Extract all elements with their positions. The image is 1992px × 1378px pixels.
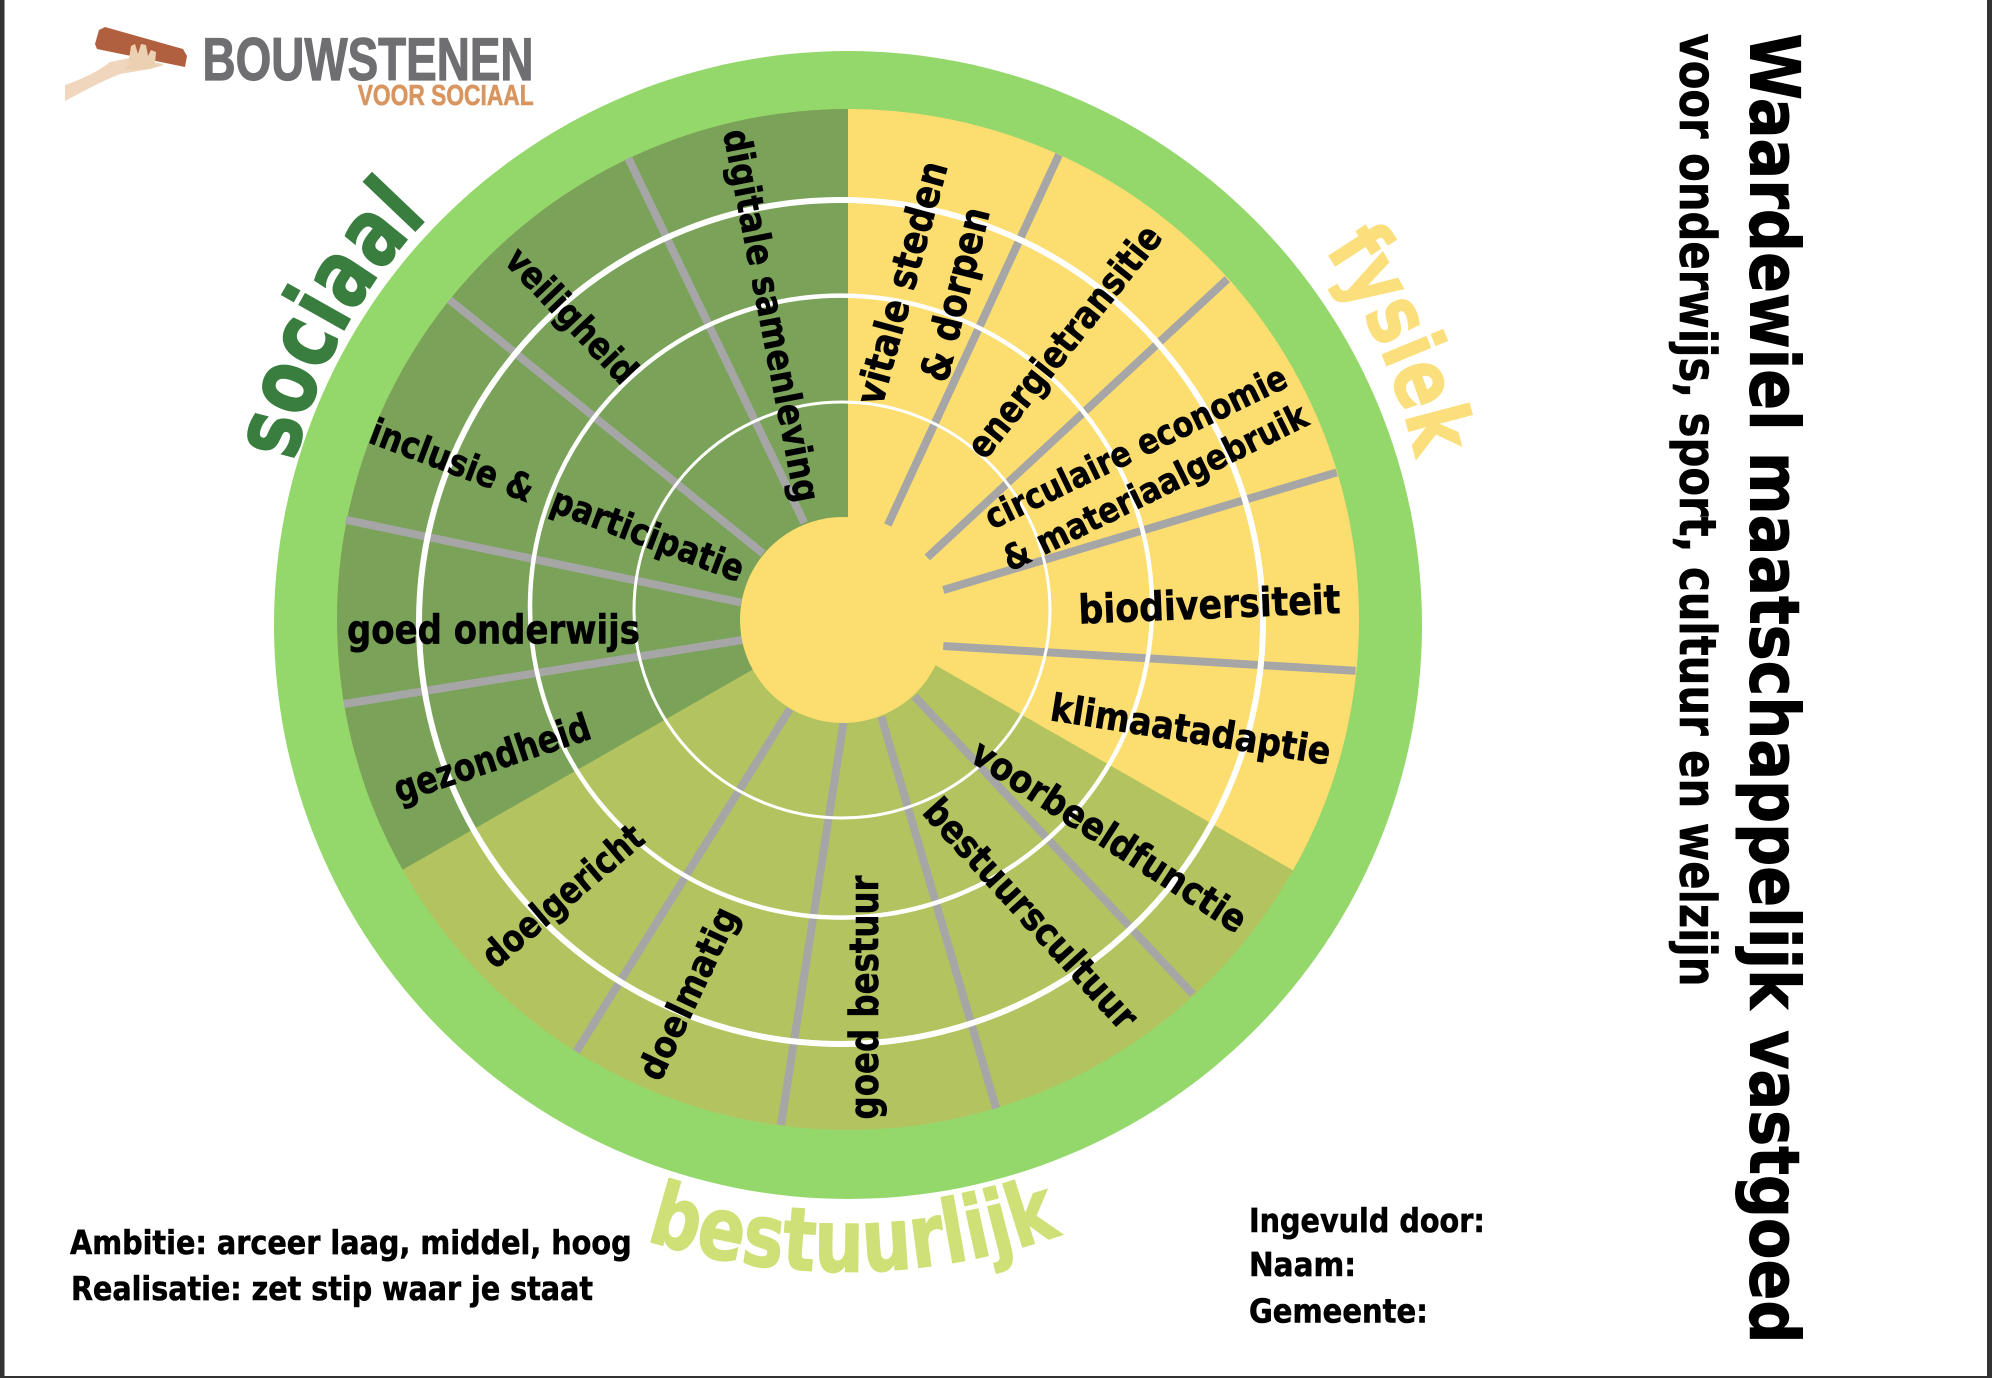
subtitle: voor onderwijs, sport, cultuur en welzijn — [1667, 34, 1726, 986]
label: energietransitie: energietransitie — [958, 216, 1171, 467]
label: digitale samenleving: digitale samenleving — [714, 126, 829, 506]
label: goed bestuur: goed bestuur — [842, 875, 888, 1120]
labels: sociaal — [347, 126, 829, 812]
label: bestuurscultuur: bestuurscultuur — [914, 789, 1147, 1039]
label: klimaatadaptie: klimaatadaptie — [1048, 685, 1334, 774]
outer green ring — [274, 51, 1422, 1199]
label: voorbeeldfunctie: voorbeeldfunctie — [963, 731, 1255, 942]
gemeente: Gemeente: — [1249, 1292, 1428, 1331]
ring: laag — [634, 402, 1050, 818]
label: vitale steden: vitale steden — [847, 156, 958, 410]
instructions — [70, 1223, 632, 1308]
center hub — [740, 517, 946, 723]
label: circulaire economie: circulaire economie — [979, 358, 1294, 538]
heading: bestuurlijk — [650, 1178, 1064, 1274]
labels: fysiek — [847, 156, 1341, 774]
logo wordmark: BOUWSTENEN — [202, 26, 534, 93]
label: & dorpen: & dorpen — [912, 203, 1000, 386]
ring: middel — [530, 296, 1152, 918]
ring: hoog — [419, 200, 1263, 1044]
form fields — [1249, 1201, 1485, 1331]
heading: sociaal: sociaal — [247, 172, 425, 458]
label: inclusie & participatie: inclusie & participatie — [364, 410, 750, 591]
heading: sociaal — [247, 172, 425, 458]
wheel base: bestuurlijk sector — [337, 109, 1359, 1130]
wheel — [274, 51, 1422, 1199]
realisatie: Realisatie: zet stip waar je staat — [71, 1269, 593, 1308]
label: doelmatig: doelmatig — [629, 900, 747, 1087]
labels: bestuurlijk — [473, 731, 1255, 1120]
heading: fysiek — [1328, 224, 1473, 460]
naam: Naam: — [1249, 1245, 1356, 1284]
ingevuld door: Ingevuld door: — [1249, 1201, 1485, 1240]
ambitie: Ambitie: arceer laag, middel, hoog — [70, 1223, 632, 1262]
spoke dividers — [344, 155, 1356, 1125]
sector: fysiek — [848, 109, 1359, 870]
icon: arm holding brick — [65, 27, 187, 101]
label: goed onderwijs: goed onderwijs — [347, 608, 640, 654]
logo: Bouwstenen voor sociaal — [65, 26, 534, 112]
label: gezondheid: gezondheid — [388, 705, 596, 812]
label: veiligheid: veiligheid — [496, 239, 646, 393]
heading: bestuurlijk: bestuurlijk — [650, 1178, 1064, 1274]
logo tagline: VOOR SOCIAAL — [358, 80, 534, 112]
sector: sociaal — [337, 109, 848, 870]
label: & materiaalgebruik: & materiaalgebruik — [996, 396, 1315, 580]
label: biodiversiteit: biodiversiteit — [1078, 577, 1341, 634]
heading: fysiek: fysiek — [1328, 224, 1473, 460]
label: doelgericht: doelgericht — [473, 815, 653, 977]
